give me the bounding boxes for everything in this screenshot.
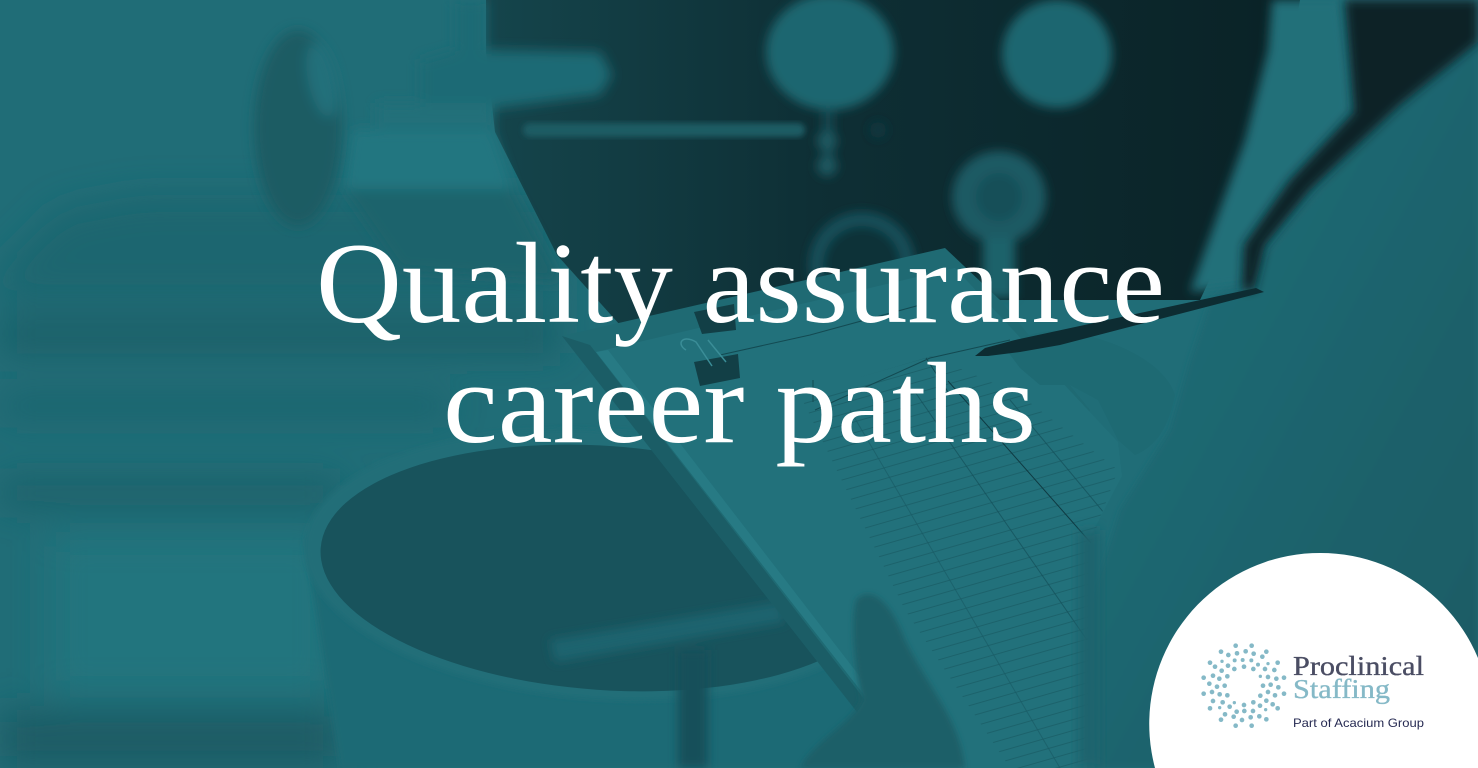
gauge 2	[1002, 0, 1112, 108]
hand	[1008, 331, 1175, 455]
stirrer rod	[550, 602, 785, 768]
title line 1: Quality assurance	[316, 220, 1165, 348]
dark gap and stethoscope	[1242, 0, 1478, 290]
icon: dotted ring	[1201, 643, 1286, 728]
wordmark: Proclinical: Proclinical	[1293, 651, 1424, 681]
paper shadow	[596, 350, 878, 700]
blurred wheel	[254, 30, 344, 226]
dark equipment panel	[486, 0, 1300, 325]
hand with pen	[975, 288, 1264, 455]
wordmark: Staffing: Staffing	[1293, 674, 1390, 704]
gauge 4 ring	[816, 219, 908, 311]
clipboard	[562, 248, 1140, 768]
title	[316, 220, 1165, 468]
vessel rim	[295, 411, 909, 719]
blurred bar	[523, 123, 805, 137]
binder clips	[681, 304, 740, 386]
paper	[596, 268, 1122, 768]
vessel	[295, 411, 909, 768]
white logo badge	[1149, 553, 1478, 768]
top funnel	[344, 0, 612, 280]
table rows	[804, 356, 1115, 768]
left blurred bench	[0, 195, 560, 768]
title line 2: career paths	[443, 340, 1036, 468]
gauge 1	[766, 0, 894, 176]
form headers	[720, 305, 1010, 410]
hand lower thumb	[800, 594, 965, 768]
lab coat	[1088, 0, 1478, 768]
vessel interior	[312, 426, 898, 710]
board	[562, 248, 1090, 712]
board edge	[562, 336, 865, 712]
gauge 3	[952, 151, 1046, 298]
pen	[975, 288, 1264, 356]
paper edge fade	[1078, 530, 1100, 768]
coat body	[1088, 40, 1478, 768]
tagline: Part of Acacium Group	[1293, 716, 1424, 730]
collar	[1190, 0, 1352, 292]
logo	[1201, 643, 1424, 730]
